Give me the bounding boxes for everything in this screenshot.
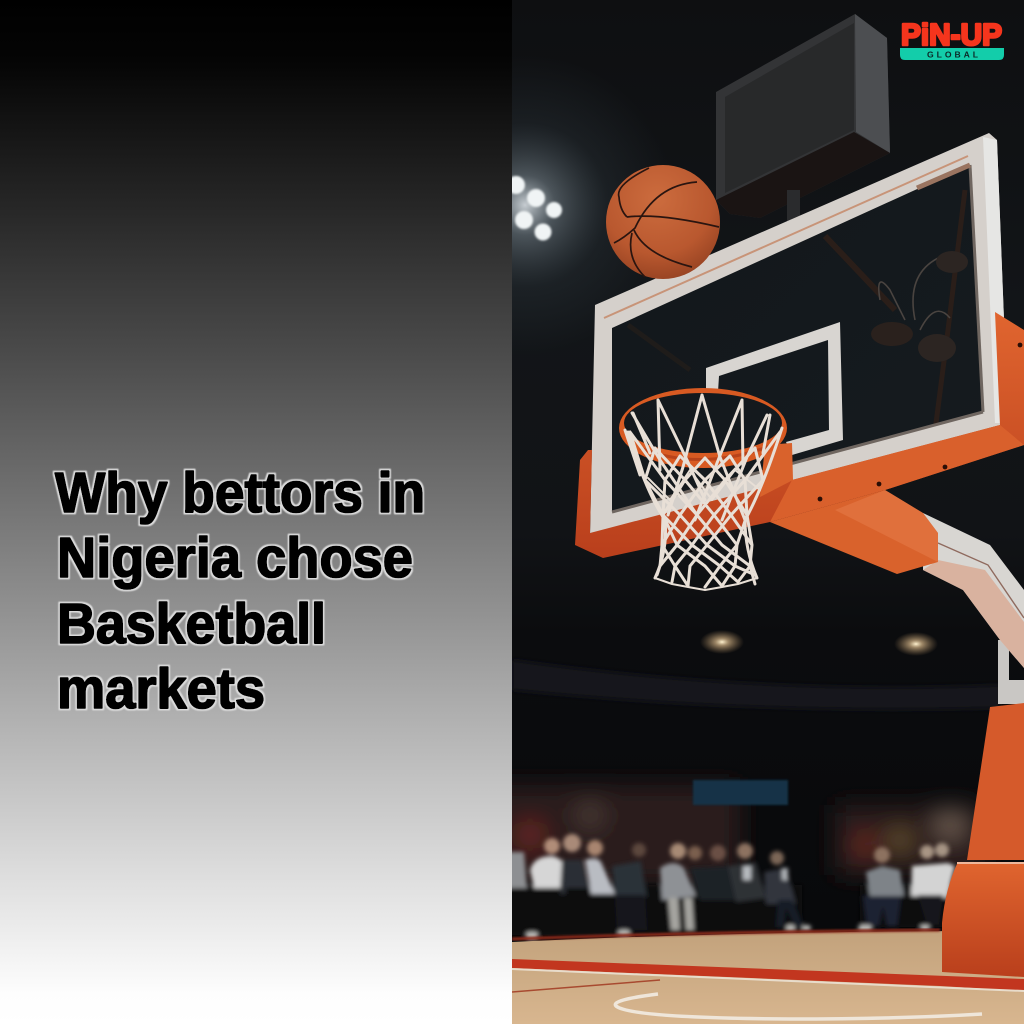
person 2 — [557, 831, 590, 897]
backboard white frame — [590, 133, 1008, 535]
logo: PIN-UP Global: PiN-UP — [901, 17, 1002, 52]
arena background — [512, 0, 1024, 1024]
person 7 — [728, 843, 766, 902]
rim bracket — [760, 443, 793, 497]
title: markets — [57, 657, 265, 721]
title: Nigeria chose — [57, 526, 413, 590]
title: Basketball — [57, 592, 326, 656]
arena sign — [693, 780, 788, 805]
person 8 — [764, 851, 804, 927]
ceiling lamps — [700, 630, 938, 656]
person 9 — [863, 847, 904, 926]
spotlight cluster — [512, 94, 631, 314]
upper tier band — [512, 660, 1000, 710]
crowd — [490, 780, 985, 940]
person 5 — [660, 843, 696, 930]
hoop and net — [619, 388, 787, 590]
orange frame — [575, 312, 1024, 558]
backboard support base — [942, 640, 1024, 977]
person 3 — [585, 840, 615, 894]
title — [55, 461, 425, 721]
glass — [962, 170, 968, 172]
left gradient panel — [0, 0, 512, 1024]
shooter square — [706, 322, 843, 455]
person 1 — [528, 838, 570, 933]
person 6 — [688, 845, 744, 900]
scoreboard — [716, 14, 890, 230]
photo: basketball arena — [512, 0, 1024, 1024]
frame bolts — [818, 343, 1022, 501]
shoes — [526, 925, 930, 940]
person 4 — [612, 843, 647, 930]
title: Why bettors in — [55, 461, 425, 525]
net — [625, 395, 782, 590]
backboard — [575, 133, 1024, 558]
background crowd haze — [490, 785, 985, 885]
rim — [619, 388, 787, 468]
basketball court floor — [512, 930, 1024, 1024]
logo: PIN-UP Global: GLOBAL — [927, 50, 978, 60]
person 10 — [911, 843, 955, 925]
support arm — [770, 490, 1024, 668]
rear rigging — [627, 190, 968, 424]
basketball — [606, 165, 720, 279]
front row spectators — [505, 834, 955, 940]
